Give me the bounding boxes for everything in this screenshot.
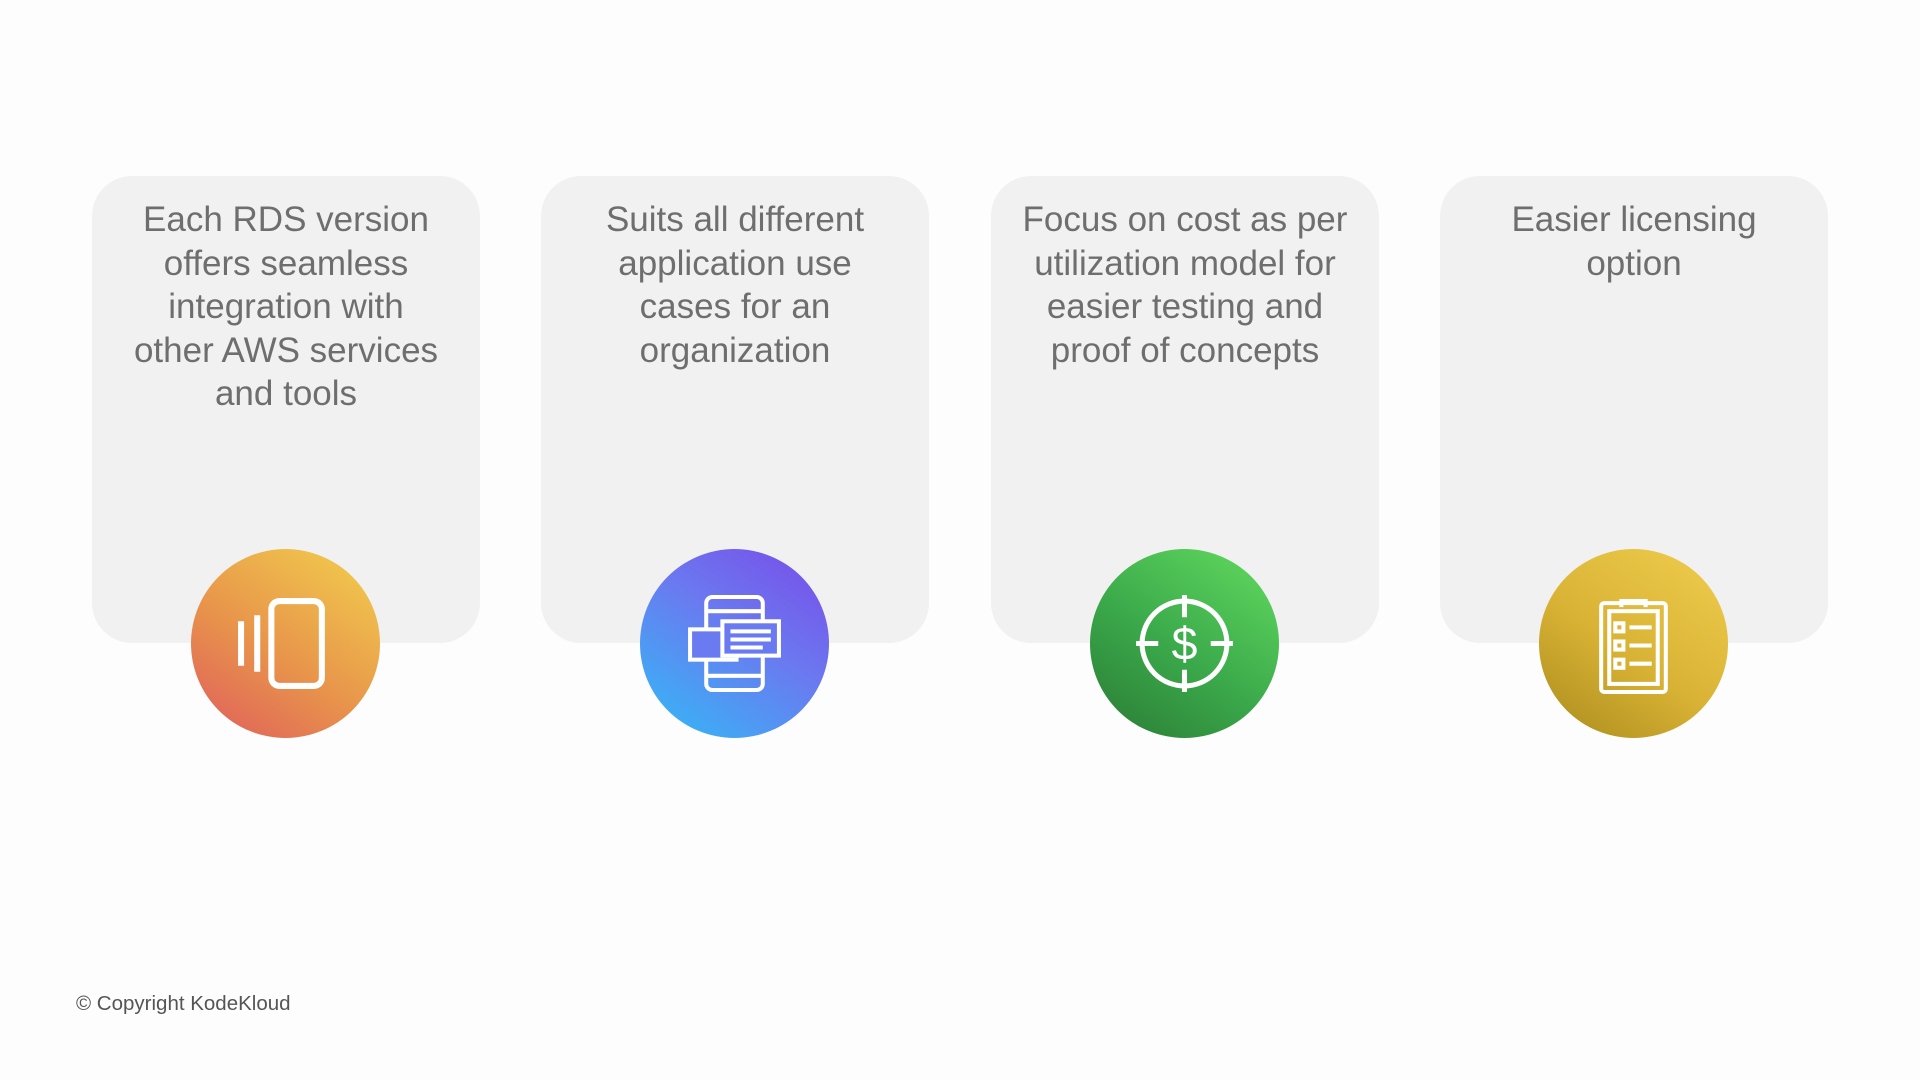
- text 2: Suits all different: [606, 200, 864, 239]
- icon: dollar target: $: [1172, 618, 1198, 670]
- card 3: [991, 176, 1379, 643]
- text 3: proof of concepts: [1051, 330, 1319, 370]
- icon: clipboard: [1539, 549, 1728, 738]
- text 3: easier testing and: [1047, 287, 1323, 326]
- text 1: integration with: [168, 287, 404, 326]
- text 1: other AWS services: [134, 330, 438, 370]
- text 3: Focus on cost as per: [1023, 200, 1347, 239]
- text 1: offers seamless: [164, 244, 408, 282]
- text 1: and tools: [215, 374, 357, 413]
- text 2: application use: [618, 244, 852, 282]
- card 2: [541, 176, 929, 643]
- icon: devices: [191, 549, 380, 738]
- text 4: option: [1586, 244, 1682, 282]
- text 2: organization: [640, 330, 830, 370]
- text 2: cases for an: [640, 287, 830, 326]
- text 1: [134, 200, 438, 413]
- icon: dollar target: [1090, 549, 1279, 738]
- card 1: [92, 176, 480, 643]
- text 4: Easier licensing: [1511, 200, 1757, 239]
- text 1: Each RDS version: [143, 200, 429, 239]
- text 4: [1511, 200, 1757, 282]
- card 4: [1440, 176, 1828, 643]
- copyright: © Copyright KodeKloud: [76, 992, 291, 1015]
- text 2: [606, 200, 864, 370]
- text 3: utilization model for: [1034, 244, 1336, 282]
- icon: mobile chat: [640, 549, 829, 738]
- text 3: [1023, 200, 1347, 370]
